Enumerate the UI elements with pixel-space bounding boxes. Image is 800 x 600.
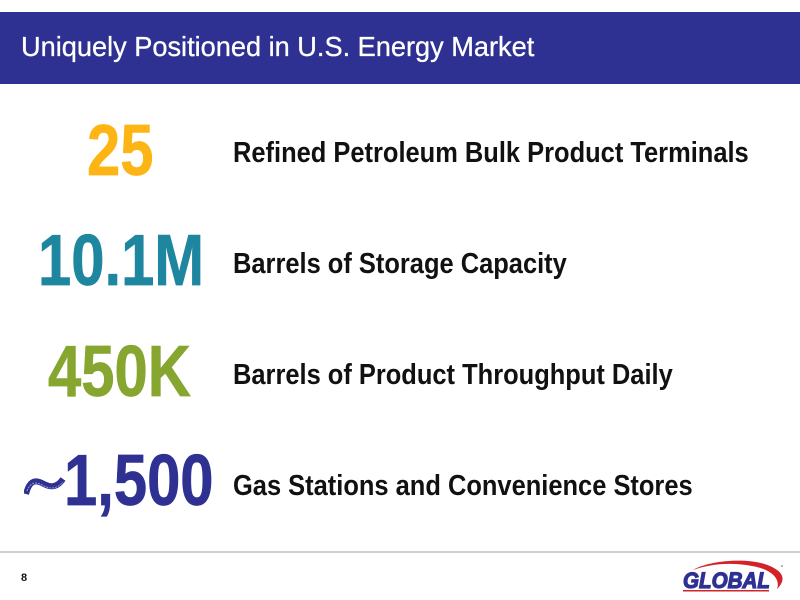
icon: tilde — [24, 477, 66, 495]
label: terminals: Refined Petroleum Bulk Product Terminals — [233, 137, 749, 169]
logo: GLOBAL: GLOBAL — [683, 568, 770, 593]
label: storage: Barrels of Storage Capacity — [233, 248, 567, 280]
stat: 1,500 stations — [24, 441, 214, 521]
title banner — [0, 12, 800, 84]
label: throughput: Barrels of Product Throughput Daily — [233, 359, 673, 391]
stat: 450K throughput: 450K — [48, 332, 191, 412]
footer divider — [0, 551, 800, 553]
stat: 25 terminals: 25 — [87, 111, 153, 191]
stat: 10.1M storage: 10.1M — [38, 221, 204, 301]
page number: 8 — [21, 572, 27, 584]
label: stations: Gas Stations and Convenience Stores — [233, 470, 693, 502]
title: Uniquely Positioned in U.S. Energy Market — [21, 31, 534, 62]
number: 1,500 — [64, 441, 214, 521]
